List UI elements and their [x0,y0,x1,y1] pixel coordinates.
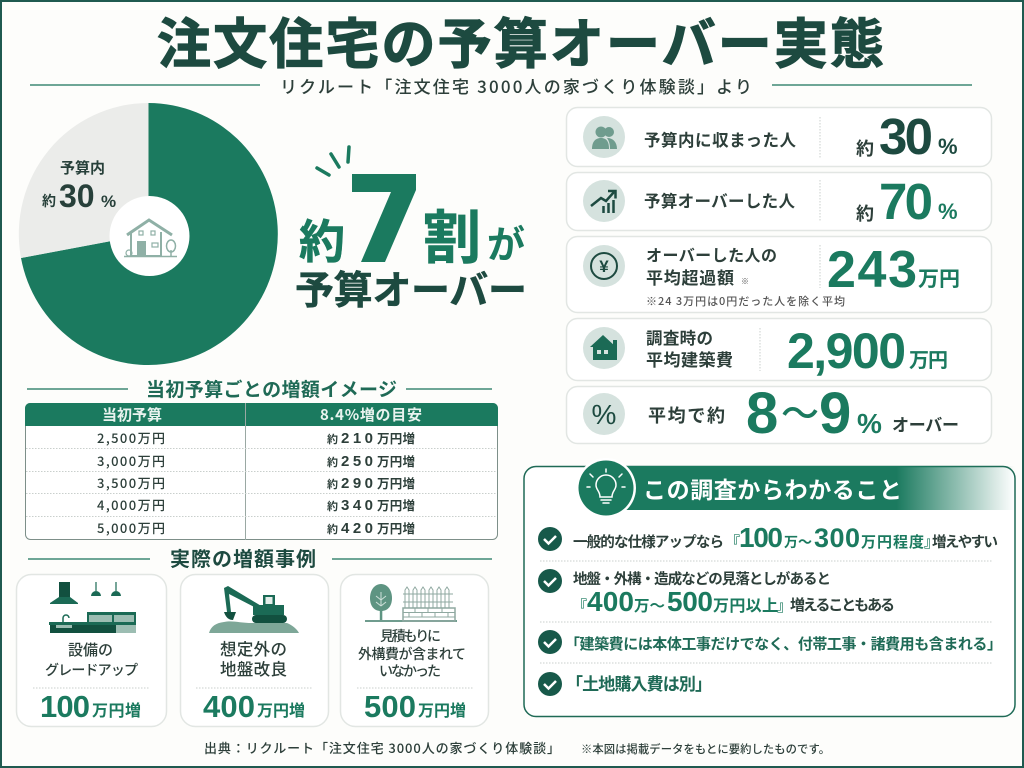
panel: stat average excess: ※ [741,276,749,287]
donut chart: budget share [19,103,278,365]
icon: rising chart [591,191,616,213]
panel: stat within budget: % [938,134,958,159]
panel: example equipment upgrade: 設備の [68,639,113,660]
headline: about 70 percent over budget: 予算オーバー [295,260,527,316]
panel: example equipment upgrade: 万円増 [92,697,141,721]
panel: stat average build cost: 平均建築費 [646,346,733,371]
panel: example ground improvement [180,574,328,726]
panel: stat over budget: 予算オーバーした人 [644,188,796,212]
table: increase by initial budget: 8.4%増の目安 [320,404,422,425]
finding 2: 400 [587,586,634,617]
panel: stat within budget: 約 [856,135,874,161]
panel: example exterior cost: いなかった [379,661,441,681]
finding 1: 万円程度 [861,531,924,552]
finding 2: 』 [777,595,792,616]
table: increase by initial budget: 万円増 [377,451,415,470]
panel: stat average percent over: 平均で約 [648,402,725,428]
table: increase by initial budget: 290 [341,475,373,492]
icon: people [592,126,617,149]
table: increase by initial budget: 2,500万円 [97,428,165,447]
finding 1: 『 [725,531,740,552]
panel: example ground improvement: 万円増 [257,697,305,721]
panel: stat over budget: 70 [879,173,933,230]
table: increase by initial budget: 3,000万円 [97,451,165,470]
panel: stat average percent over: 8 [746,381,778,446]
finding 1: 万～ [784,532,812,552]
panel: findings [524,458,1015,716]
table: increase by initial budget: 万円増 [377,428,415,447]
panel: stat average excess: オーバーした人の [646,242,777,266]
icon: tree and fence [365,584,457,621]
headline: about 70 percent over budget: 約 [299,206,345,272]
section heading: actual examples: 実際の増額事例 [170,543,316,572]
title: 注文住宅の予算オーバー実態 [157,0,884,79]
finding 2: 万～ [634,594,665,616]
headline: about 70 percent over budget: が [487,214,525,269]
table: increase by initial budget: 4,000万円 [97,495,165,514]
panel: stat average percent over [566,381,992,446]
table: increase by initial budget: 210 [341,430,373,447]
icon: kitchen [49,582,136,633]
panel: stat within budget: 予算内に収まった人 [644,127,796,151]
table: increase by initial budget: 約 [327,521,338,537]
table: increase by initial budget: 3,500万円 [97,473,165,492]
panel: example exterior cost: 見積もりに [380,626,441,646]
table: increase by initial budget: 250 [341,453,373,470]
panel: stat average excess [566,236,992,312]
icon: house [124,220,177,257]
panel: stat average excess: 万円 [918,263,960,293]
finding 3: 「建築費には本体工事だけでなく、付帯工事・諸費用も含まれる」 [565,633,1002,654]
icon: percent: % [592,399,616,430]
panel: stat average percent over: オーバー [892,411,959,436]
headline: about 70 percent over budget [295,147,527,316]
table: increase by initial budget: 万円増 [377,495,415,514]
finding 1: 一般的な仕様アップなら [573,531,724,552]
donut label: 30 percent: % [101,192,116,211]
panel: stat average build cost: 調査時の [646,325,713,349]
panel: example exterior cost: 外構費が含まれて [358,644,466,664]
panel: example ground improvement: 想定外の [220,636,287,660]
panel: example exterior cost: 万円増 [418,697,466,721]
table: increase by initial budget: 万円増 [377,518,415,537]
panel: stat average excess: 243 [827,241,917,299]
finding 2: 増えることもある [790,594,895,615]
finding 2: 万円以上 [713,592,778,616]
footer source note: 出典：リクルート「注文住宅 3000人の家づくり体験談」 [204,738,560,757]
donut label: 30 percent: 30 [59,178,95,214]
table: increase by initial budget: 万円増 [377,473,415,492]
finding 1: 300 [814,523,860,553]
icon: light bulb [587,469,625,503]
footer source note [204,738,830,757]
panel: stat over budget: % [938,199,958,224]
findings header band: この調査からわかること [643,471,902,505]
finding 2: 『 [572,595,587,616]
table: increase by initial budget [25,403,498,540]
table: increase by initial budget: 約 [327,476,338,492]
finding 2: 地盤・外構・造成などの見落としがあると [573,568,831,589]
headline: about 70 percent over budget: 割 [423,191,481,275]
panel: stat average excess: 平均超過額 [646,264,734,289]
table: increase by initial budget: 340 [341,497,373,514]
panel: example equipment upgrade [16,574,166,726]
donut label: 30 percent: 予算内 [60,157,105,178]
icon: yen [591,253,617,279]
panel: stat within budget: 30 [879,108,933,165]
panel: example ground improvement: 地盤改良 [220,656,287,680]
panel: example equipment upgrade: グレードアップ [45,660,138,680]
table: increase by initial budget: 約 [327,454,338,470]
table: increase by initial budget: 約 [327,431,338,447]
section heading: budget table: 当初予算ごとの増額イメージ [146,375,397,402]
finding 2 [538,568,895,617]
panel: stat average excess: ※24 3万円は0円だった人を除く平均 [646,293,845,309]
donut label: 30 percent: 約 [42,191,56,211]
panel: stat average percent over: % [857,408,882,439]
finding 1: 100 [739,522,783,553]
panel: stat over budget: 約 [856,200,874,226]
donut label: 30 percent [42,157,116,214]
subtitle: リクルート「注文住宅 3000人の家づくり体験談」より [280,73,752,98]
panel: example ground improvement: 400 [203,689,255,724]
icon: yen: ¥ [599,257,609,276]
table: increase by initial budget: 420 [341,520,373,537]
icon: house solid [590,335,617,360]
panel: stat average percent over: ～ [781,383,819,438]
table: increase by initial budget: 約 [327,498,338,514]
footer source note: ※本図は掲載データをもとに要約したものです。 [581,741,830,757]
panel: stat average percent over: 9 [819,381,851,446]
icon: excavator [209,586,299,633]
finding 1: 』 [924,531,939,552]
finding 1: 増えやすい [932,531,998,552]
panel: stat within budget [566,108,992,166]
panel: stat average build cost: 2,900 [787,323,906,379]
panel: stat average build cost [566,318,992,380]
panel: example equipment upgrade: 100 [40,689,90,724]
panel: stat over budget [566,172,992,230]
table: increase by initial budget: 5,000万円 [97,518,165,537]
panel: stat average build cost: 万円 [909,344,948,373]
table: increase by initial budget: 当初予算 [102,404,162,425]
panel: example exterior cost: 500 [364,689,416,724]
finding 4: 「土地購入費は別」 [566,670,712,695]
finding 1 [538,522,998,553]
finding 2: 500 [667,586,713,617]
panel: example exterior cost [340,574,488,726]
icon: emphasis marks [317,147,349,175]
findings header band [576,458,1015,518]
